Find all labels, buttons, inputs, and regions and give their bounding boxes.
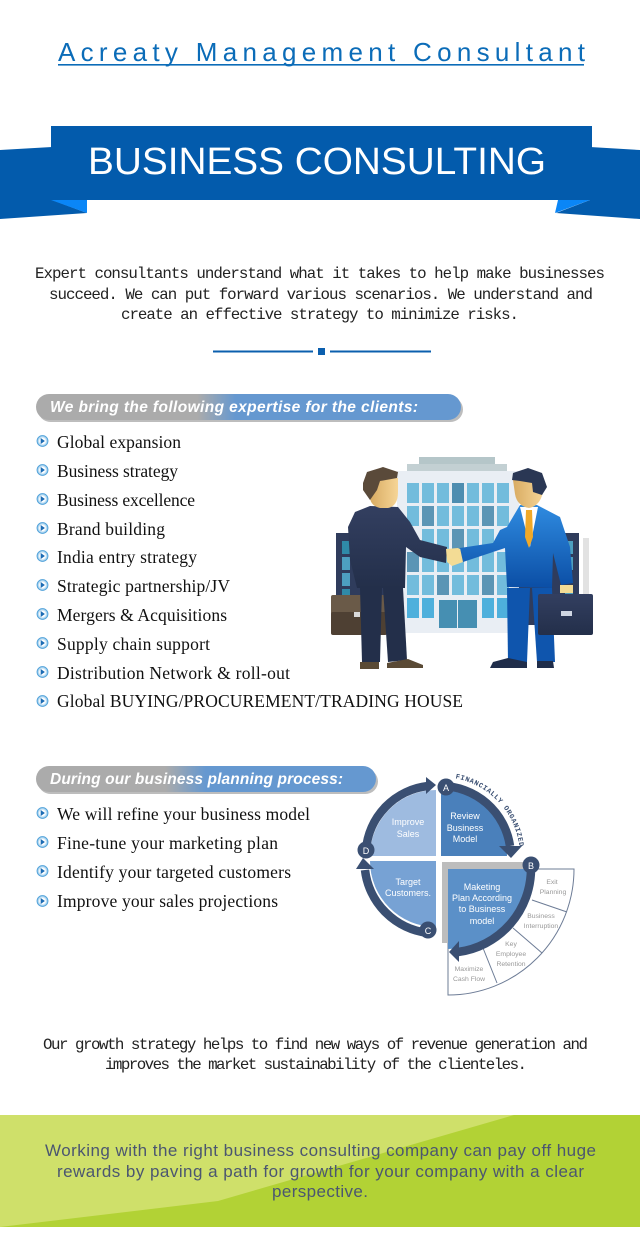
cycle diagram: Cash Flow (453, 976, 485, 983)
footer band: Working with the right business consulting company can pay off huge (45, 1141, 596, 1160)
expertise list: Global expansion (57, 432, 181, 452)
cycle diagram (356, 774, 574, 996)
cycle diagram: Employee (496, 951, 526, 958)
title: Acreaty Management Consultant (58, 37, 586, 67)
cycle diagram: to Business (459, 904, 506, 914)
heading pill: planning process: During our business planning process: (50, 771, 343, 788)
banner: business consulting (0, 126, 640, 219)
cycle diagram: Retention (496, 961, 526, 968)
footer band: perspective. (272, 1182, 368, 1201)
footer band (0, 1115, 640, 1227)
expertise list (37, 432, 463, 711)
cycle diagram: Plan According (452, 893, 512, 903)
cycle diagram: FINANCIALLY ORGANIZED (456, 774, 524, 846)
planning list: Identify your targeted customers (57, 862, 291, 882)
intro text: create an effective strategy to minimize risks. (121, 306, 519, 324)
cycle diagram: Key (505, 941, 517, 948)
divider (213, 348, 431, 355)
curved label: financially organized (455, 778, 519, 845)
left man with briefcase (331, 467, 447, 669)
cycle diagram: Improve (392, 817, 424, 827)
expertise list: Business excellence (57, 490, 195, 510)
cycle diagram: Model (453, 834, 477, 844)
building (336, 457, 589, 633)
closing text: Our growth strategy helps to find new ways of revenue generation and (43, 1036, 588, 1054)
planning list: Improve your sales projections (57, 891, 278, 911)
intro text (35, 265, 605, 324)
cycle diagram: Customers. (385, 888, 431, 898)
handshake (446, 548, 464, 566)
footer band: rewards by paving a path for growth for your company with a clear (57, 1162, 584, 1181)
cycle diagram: A (443, 783, 449, 793)
illustration: businessmen handshake in front of building (331, 457, 593, 669)
expertise list: Mergers & Acquisitions (57, 605, 227, 625)
planning list (37, 804, 310, 911)
intro text: succeed. We can put forward various scenarios. We understand and (49, 286, 593, 304)
cycle diagram: model (470, 916, 494, 926)
outer plan segments (448, 869, 574, 995)
cycle diagram: Review (450, 811, 480, 821)
cycle diagram: Sales (397, 829, 420, 839)
right man with briefcase (460, 468, 593, 668)
cycle diagram: Target (395, 877, 421, 887)
expertise list: Global BUYING/PROCUREMENT/TRADING HOUSE (57, 691, 463, 711)
cycle diagram: Maketing (464, 882, 500, 892)
expertise list: Brand building (57, 519, 165, 539)
planning list: Fine-tune your marketing plan (57, 833, 278, 853)
cycle diagram: C (425, 926, 432, 936)
banner: business consulting: BUSINESS CONSULTING (88, 141, 546, 183)
quadrant B shadow (442, 862, 525, 943)
intro text: Expert consultants understand what it takes to help make businesses (35, 265, 605, 283)
cycle diagram: Planning (540, 889, 566, 896)
closing text (43, 1036, 588, 1074)
cycle diagram: Interruption (524, 923, 558, 930)
expertise list: Supply chain support (57, 634, 210, 654)
quadrants (441, 790, 507, 856)
cycle diagram: D (363, 846, 370, 856)
cycle diagram: Maximize (455, 966, 484, 973)
heading pill: expertise (36, 394, 463, 422)
cycle diagram: B (528, 861, 534, 871)
heading pill: expertise: We bring the following expertise for the clients: (50, 399, 418, 416)
expertise list: Distribution Network & roll-out (57, 663, 290, 683)
expertise list: Business strategy (57, 461, 178, 481)
heading pill: planning process (36, 766, 378, 794)
cycle diagram: Business (527, 913, 555, 920)
cycle diagram: Business (447, 823, 484, 833)
closing text: improves the market sustainability of the clienteles. (105, 1056, 527, 1074)
expertise list: India entry strategy (57, 547, 197, 567)
arrows (365, 786, 531, 952)
cycle diagram: Exit (546, 879, 558, 886)
expertise list: Strategic partnership/JV (57, 576, 230, 596)
planning list: We will refine your business model (57, 804, 310, 824)
